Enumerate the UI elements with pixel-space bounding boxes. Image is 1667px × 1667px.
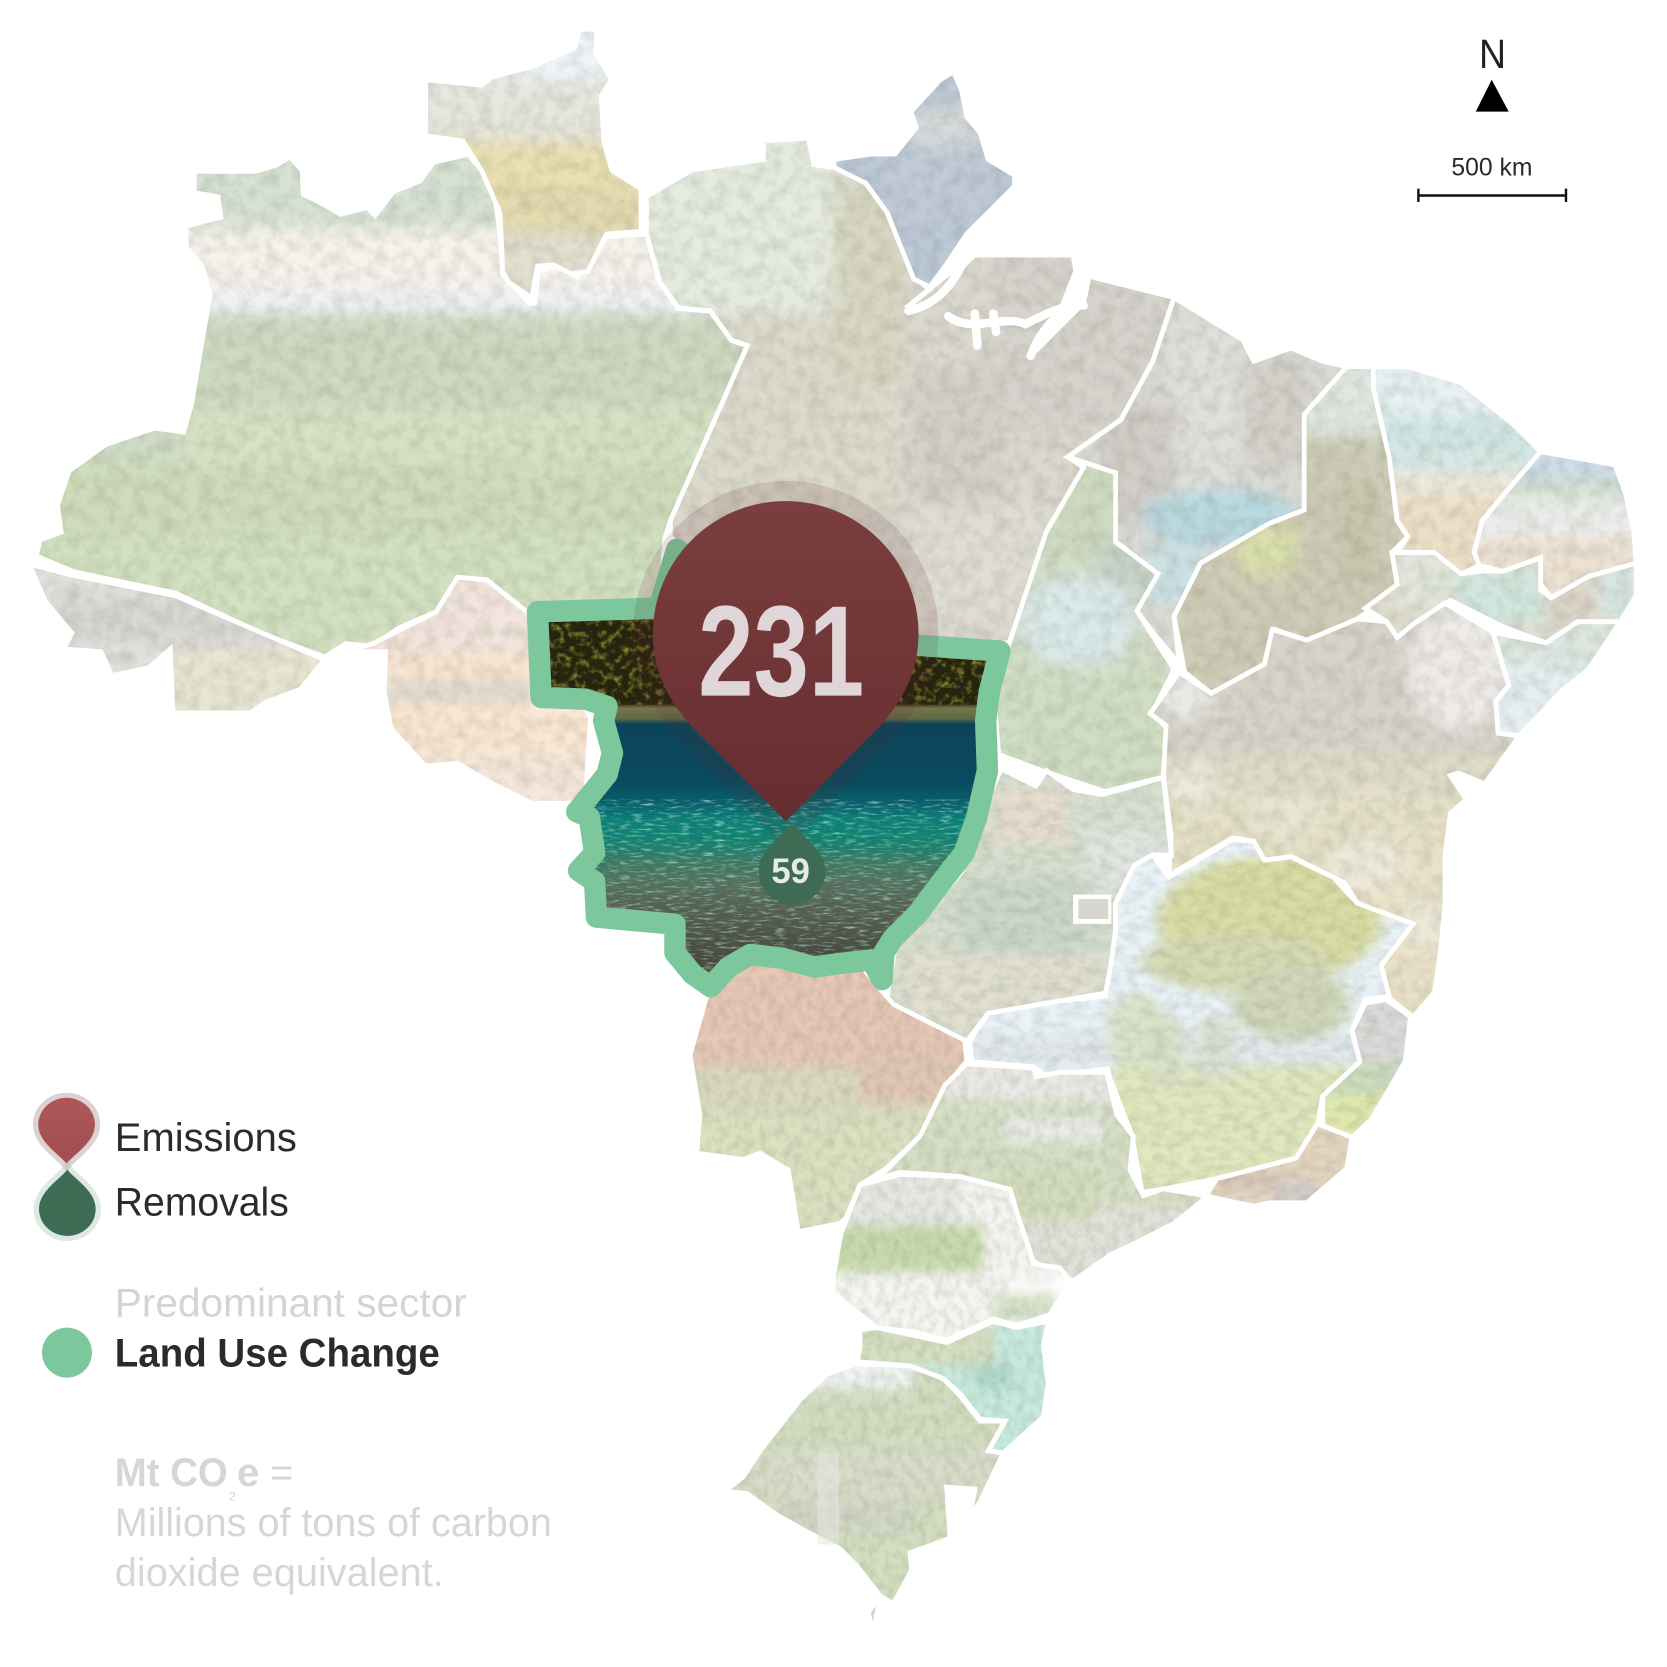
state: Paraiba coast photo bbox=[1361, 550, 1634, 640]
state: Maranhao rock photo bbox=[1062, 300, 1342, 656]
emissions pin halo bbox=[633, 481, 939, 849]
state: Piaui cactus photo bbox=[1169, 361, 1413, 701]
state: Rondonia sunset photo bbox=[362, 574, 588, 801]
state: Tocantins water and plants photo bbox=[998, 456, 1172, 790]
state: Federal District bbox=[1073, 895, 1111, 924]
state: Rio Grande do Sul canyon photo bbox=[720, 1362, 1010, 1638]
map section: north and north-east states bbox=[637, 64, 1642, 1031]
scale bar bbox=[1418, 153, 1566, 202]
note: unit definition: = bbox=[270, 1451, 293, 1495]
highlighted state and pins bbox=[521, 481, 1021, 1003]
legend: emissions and removals bbox=[38, 1098, 297, 1236]
note: unit definition: dioxide equivalent. bbox=[115, 1551, 444, 1595]
note: unit definition: Millions of tons of carbon bbox=[115, 1501, 552, 1545]
state: Acre photo bbox=[34, 568, 320, 710]
state: Mato Grosso underwater photo with green outline bbox=[521, 531, 1021, 1003]
state: Rio de Janeiro photo bbox=[1210, 1122, 1351, 1204]
icon: emissions drop bbox=[38, 1098, 95, 1164]
label: removals: Removals bbox=[115, 1181, 289, 1225]
state: Sao Paulo park photo bbox=[857, 1060, 1210, 1289]
label: emissions: Emissions bbox=[115, 1116, 297, 1160]
state: Para north coast islands bbox=[908, 241, 1084, 356]
scale bar: 500 km bbox=[1451, 153, 1532, 181]
state: Ceara beach photo bbox=[1372, 369, 1538, 571]
state: Alagoas and Sergipe photo bbox=[1496, 619, 1619, 734]
removals pin with value: 59 bbox=[771, 852, 810, 891]
state: Amapa acai berry photo bbox=[833, 75, 1012, 285]
state: Minas Gerais tree photo bbox=[962, 834, 1418, 1196]
state: Parana waterfall photo bbox=[827, 1170, 1077, 1345]
icon: removals drop bbox=[39, 1170, 96, 1236]
state: Mato Grosso do Sul cliff photo bbox=[680, 940, 973, 1242]
icon: land use change dot bbox=[42, 1328, 92, 1378]
north arrow bbox=[1476, 31, 1509, 112]
waterfall in Rio Grande do Sul photo bbox=[817, 1453, 839, 1545]
state: Amazonas forest photo bbox=[39, 157, 744, 654]
note: unit definition: Mt CO bbox=[115, 1451, 228, 1495]
map section: centre and south-east states bbox=[882, 765, 1418, 1210]
state: Goias misty forest photo bbox=[882, 765, 1179, 1044]
state: Bahia grassland photo bbox=[1142, 600, 1525, 1031]
legend: predominant sector bbox=[42, 1281, 467, 1378]
heading: predominant sector: Predominant sector bbox=[115, 1281, 467, 1325]
state: Espirito Santo photo bbox=[1320, 1002, 1408, 1134]
note: unit definition: 2 bbox=[229, 1490, 236, 1504]
note: unit definition bbox=[115, 1451, 552, 1595]
emissions pin with value bbox=[653, 501, 919, 821]
note: unit definition: e bbox=[237, 1451, 259, 1495]
removals pin with value bbox=[759, 822, 826, 904]
state: Santa Catarina lagoon photo bbox=[853, 1319, 1053, 1459]
state: Roraima photo bbox=[428, 32, 639, 294]
emissions pin with value: 231 bbox=[698, 580, 864, 724]
map section: south states bbox=[680, 940, 1210, 1638]
state: Rio Grande do Norte dunes photo bbox=[1472, 454, 1634, 594]
state: Para tree photo bbox=[648, 140, 1171, 640]
label: land use change: Land Use Change bbox=[115, 1331, 440, 1375]
map section: north-west states bbox=[21, 21, 766, 809]
north arrow: N bbox=[1479, 31, 1506, 77]
